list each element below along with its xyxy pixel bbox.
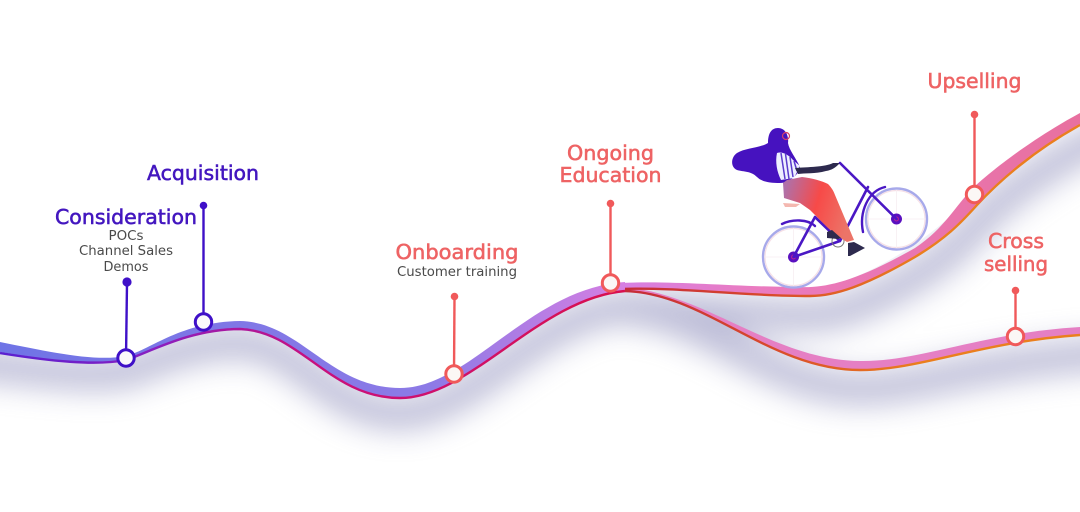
striped shirt [776, 152, 800, 180]
text block: Consideration: Channel Sales [79, 244, 173, 259]
heading: Ongoing Education: Ongoing [567, 141, 654, 165]
text block: Consideration: Consideration [55, 205, 197, 229]
heading: Ongoing Education: Education [560, 163, 662, 187]
marker: Cross selling [1007, 287, 1024, 345]
hair [732, 128, 800, 183]
skirt [783, 177, 854, 242]
hand skin [783, 203, 800, 207]
heading: Acquisition: Acquisition [147, 161, 259, 185]
heading: Cross selling: selling [984, 252, 1048, 276]
road: upper branch [600, 113, 1080, 296]
marker: Ongoing Education [602, 200, 619, 291]
marker: Consideration [118, 277, 134, 366]
heading: Ongoing Education [560, 141, 662, 187]
front wheel [866, 188, 927, 250]
bicycle frame [782, 163, 896, 257]
shirt stripes [781, 153, 797, 179]
marker: Acquisition [195, 202, 212, 330]
heading: Upselling: Upselling [928, 69, 1022, 93]
heading: Cross selling [984, 229, 1048, 276]
icon: cyclist on bicycle [732, 128, 927, 288]
glasses [782, 132, 790, 140]
arm [795, 163, 840, 174]
text block: Onboarding [396, 240, 518, 280]
text block: Consideration: POCs [108, 229, 144, 244]
text block: Onboarding: Customer training [397, 265, 517, 280]
rear wheel [763, 226, 824, 288]
marker: Onboarding [446, 293, 462, 382]
road: main ribbon [0, 282, 625, 398]
heading: Cross selling: Cross [988, 229, 1044, 253]
shadow beneath road [0, 128, 1080, 414]
text block: Consideration [55, 205, 197, 275]
marker: Upselling [966, 111, 983, 203]
road: lower branch [615, 287, 1080, 370]
shoes [827, 230, 865, 256]
text block: Consideration: Demos [104, 260, 149, 275]
text block: Onboarding: Onboarding [396, 240, 518, 264]
